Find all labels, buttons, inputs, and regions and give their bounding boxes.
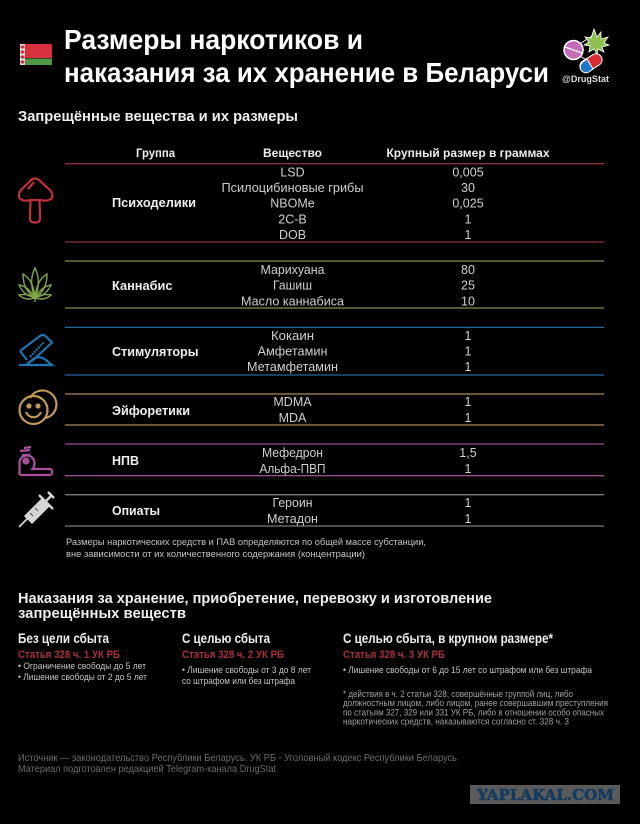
group: psychedelics: 0,005: [452, 166, 484, 180]
penalty column: large amount: • Лишение свободы от 6 до 15 лет со штрафом или без штрафа: [343, 665, 593, 676]
group: euphoretics: 1: [465, 411, 472, 425]
icon: powder sachet: [20, 447, 52, 475]
group: NPV: 1,5: [459, 446, 477, 460]
icon: Belarus flag: [20, 44, 52, 65]
penalty column: with intent to sell: • Лишение свободы от 3 до 8 лет: [182, 665, 312, 676]
title: наказания за их хранение в Беларуси: [64, 57, 549, 88]
penalty column: without intent to sell: • Ограничение свободы до 5 лет: [18, 661, 147, 672]
group: cannabis: Масло каннабиса: [241, 294, 344, 308]
source: [18, 752, 457, 775]
penalty column: with intent to sell: [182, 630, 312, 687]
group: euphoretics: Эйфоретики: [112, 403, 190, 418]
footnote: наркотических средств, наказываются согласно ст. 328 ч. 3: [343, 716, 569, 726]
group: cannabis: 10: [461, 294, 475, 308]
icon: DrugStat logo: [562, 29, 610, 85]
group: stimulants: [65, 327, 604, 375]
group: psychedelics: DOB: [279, 228, 306, 242]
group: stimulants: 1: [465, 344, 472, 358]
watermark: YAPLAKAL.COM: [476, 786, 614, 804]
heading: penalties: [18, 590, 492, 622]
footnote: * действия в ч. 2 статьи 328, совершённые группой лиц, либо: [343, 689, 573, 699]
group: opiates: Метадон: [267, 512, 318, 526]
group: opiates: Героин: [272, 496, 313, 510]
source: Источник — законодательство Республики Беларусь. УК РБ - Уголовный кодекс Республики Беларусь: [18, 752, 457, 764]
table header: Вещество: [263, 146, 322, 160]
penalty column: with intent to sell: со штрафом или без штрафа: [182, 676, 296, 687]
group: stimulants: 1: [465, 360, 472, 374]
group: psychedelics: NBOMe: [270, 196, 315, 210]
penalty column: large amount: С целью сбыта, в крупном размере*: [343, 630, 553, 646]
footnote: по статьям 327, 329 или 331 УК РБ, либо в отношении особо опасных: [343, 708, 604, 718]
icon: DrugStat logo: @DrugStat: [562, 74, 610, 85]
group: euphoretics: [65, 394, 604, 425]
group: NPV: Альфа-ПВП: [260, 462, 326, 476]
icon: cocaine card: [19, 335, 52, 365]
group: psychedelics: LSD: [280, 166, 305, 180]
group: NPV: НПВ: [112, 453, 139, 468]
group: psychedelics: 0,025: [452, 196, 484, 210]
group: opiates: Опиаты: [112, 503, 160, 518]
icon: syringe: [19, 492, 54, 527]
group: stimulants: 1: [465, 329, 472, 343]
group: psychedelics: 2C-B: [278, 212, 307, 226]
group: psychedelics: Псилоцибиновые грибы: [222, 181, 364, 195]
group: stimulants: Кокаин: [271, 329, 314, 343]
group: cannabis: Марихуана: [260, 263, 325, 277]
penalty column: without intent to sell: Статья 328 ч. 1 УК РБ: [18, 649, 120, 661]
group: cannabis: 25: [461, 278, 475, 292]
group: cannabis: Гашиш: [273, 278, 312, 292]
title: Размеры наркотиков и: [64, 24, 363, 55]
heading: penalties: запрещённых веществ: [18, 605, 186, 622]
group: stimulants: Стимуляторы: [112, 344, 198, 359]
group: opiates: [65, 495, 604, 526]
source: Материал подготовлен редакцией Telegram-канала DrugStat: [18, 763, 276, 775]
group: cannabis: [65, 261, 604, 308]
group: opiates: 1: [465, 512, 472, 526]
group: NPV: [65, 444, 604, 476]
penalty column: with intent to sell: Статья 328 ч. 2 УК РБ: [182, 649, 284, 661]
group: opiates: 1: [465, 496, 472, 510]
penalty column: without intent to sell: [18, 630, 148, 683]
group: NPV: Мефедрон: [262, 446, 323, 460]
table note: Размеры наркотических средств и ПАВ определяются по общей массе субстанции,: [66, 537, 426, 548]
icon: cannabis leaf: [19, 268, 51, 302]
penalty column: without intent to sell: • Лишение свободы от 2 до 5 лет: [18, 672, 148, 683]
footnote: [343, 689, 608, 726]
group: cannabis: 80: [461, 263, 475, 277]
table header: [136, 146, 550, 160]
group: euphoretics: MDA: [279, 411, 307, 425]
heading: substances: Запрещённые вещества и их размеры: [18, 108, 298, 125]
group: euphoretics: 1: [465, 395, 472, 409]
title: [64, 24, 549, 88]
penalty column: large amount: [343, 630, 593, 676]
heading: penalties: Наказания за хранение, приобретение, перевозку и изготовление: [18, 590, 492, 607]
icon: ecstasy pills: [20, 390, 56, 424]
group: cannabis: Каннабис: [112, 278, 172, 293]
table note: [66, 537, 426, 560]
penalty column: without intent to sell: Без цели сбыта: [18, 630, 109, 646]
group: euphoretics: MDMA: [273, 395, 312, 409]
group: psychedelics: Психоделики: [112, 195, 196, 210]
group: psychedelics: 1: [465, 212, 472, 226]
group: stimulants: Амфетамин: [258, 344, 328, 358]
group: psychedelics: [65, 164, 604, 242]
group: stimulants: Метамфетамин: [247, 360, 338, 374]
group: psychedelics: 1: [465, 228, 472, 242]
table header: Крупный размер в граммах: [386, 146, 550, 160]
table note: вне зависимости от их количественного содержания (концентрации): [66, 549, 365, 560]
penalty column: large amount: Статья 328 ч. 3 УК РБ: [343, 649, 445, 661]
group: psychedelics: 30: [461, 181, 475, 195]
group: NPV: 1: [465, 462, 472, 476]
icon: mushroom: [19, 178, 52, 222]
table header: Группа: [136, 146, 175, 160]
footnote: должностным лицом, либо лицом, ранее совершавшим преступления: [343, 698, 608, 708]
penalty column: with intent to sell: С целью сбыта: [182, 630, 270, 646]
